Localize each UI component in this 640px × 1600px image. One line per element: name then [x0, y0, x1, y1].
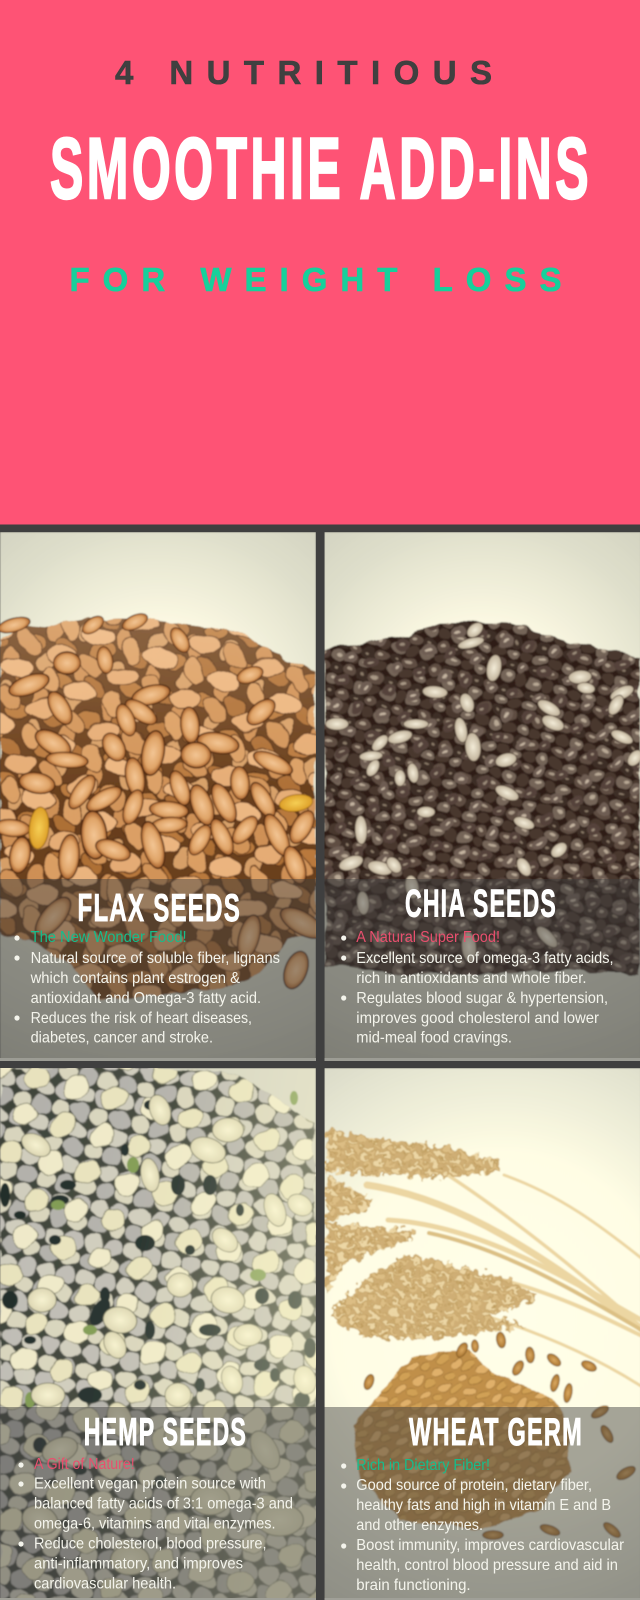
list: hemp seeds facts: omega-6, vitamins and vital enzymes.: [34, 1516, 276, 1532]
photo: flax seed pile: [0, 532, 330, 1061]
heading: hemp seeds: HEMP SEEDS: [84, 1411, 247, 1454]
photo: chia seed pile: [320, 532, 640, 1061]
list: wheat germ facts: Good source of protein, dietary fiber,: [356, 1477, 592, 1494]
list: hemp seeds facts: cardiovascular health.: [34, 1576, 176, 1592]
list: wheat germ facts: Boost immunity, improves cardiovascular: [356, 1537, 625, 1554]
photo: wheat stalks and grains: [324, 1068, 640, 1600]
list: flax seeds facts: diabetes, cancer and stroke.: [31, 1030, 213, 1046]
list: chia seeds facts: rich in antioxidants and whole fiber.: [356, 970, 586, 987]
list: chia seeds facts: [341, 929, 614, 1046]
text overlay: [0, 879, 316, 1058]
list: flax seeds facts: which contains plant estrogen &: [30, 970, 240, 987]
list: flax seeds facts: [14, 929, 280, 1046]
heading: flax seeds: FLAX SEEDS: [78, 887, 241, 930]
list: hemp seeds facts: A Gift of Nature!: [34, 1456, 135, 1473]
list: hemp seeds facts: Reduce cholesterol, blood pressure,: [34, 1536, 266, 1552]
list: chia seeds facts: mid-meal food cravings.: [356, 1030, 512, 1046]
list: chia seeds facts: improves good cholesterol and lower: [356, 1010, 600, 1027]
list: wheat germ facts: [341, 1457, 625, 1594]
list: chia seeds facts: A Natural Super Food!: [356, 929, 500, 946]
text overlay: [0, 1407, 316, 1598]
subheading: for weight loss: FOR WEIGHT LOSS: [70, 261, 562, 298]
list: flax seeds facts: Reduces the risk of heart diseases,: [31, 1010, 252, 1027]
list: chia seeds facts: Excellent source of omega-3 fatty acids,: [356, 950, 614, 967]
list: hemp seeds facts: [18, 1456, 293, 1592]
list: wheat germ facts: and other enzymes.: [356, 1517, 483, 1534]
list: flax seeds facts: Natural source of soluble fiber, lignans: [31, 950, 280, 967]
list: hemp seeds facts: balanced fatty acids of 3:1 omega-3 and: [34, 1496, 293, 1512]
list: wheat germ facts: brain functioning.: [356, 1577, 471, 1594]
list: wheat germ facts: health, control blood pressure and aid in: [356, 1557, 618, 1574]
text overlay: [324, 1407, 640, 1598]
panel: flax seeds: [0, 532, 330, 1061]
panel: wheat germ: [324, 1068, 640, 1600]
list: flax seeds facts: antioxidant and Omega-3 fatty acid.: [31, 990, 261, 1007]
panel: chia seeds: [320, 532, 640, 1061]
list: flax seeds facts: The New Wonder Food!: [31, 929, 187, 946]
panel: hemp seeds: [0, 1060, 330, 1600]
list: hemp seeds facts: anti-inflammatory, and improves: [34, 1556, 243, 1572]
list: hemp seeds facts: Excellent vegan protein source with: [34, 1476, 266, 1492]
list: wheat germ facts: healthy fats and high in vitamin E and B: [356, 1497, 611, 1514]
text overlay: [324, 879, 640, 1058]
list: wheat germ facts: Rich in Dietary Fiber!: [356, 1457, 490, 1474]
list: chia seeds facts: Regulates blood sugar & hypertension,: [356, 990, 608, 1007]
heading: 4 nutritious: 4 NUTRITIOUS: [115, 54, 492, 91]
header panel: [0, 0, 640, 524]
photo: hulled hemp seeds: [0, 1060, 330, 1600]
